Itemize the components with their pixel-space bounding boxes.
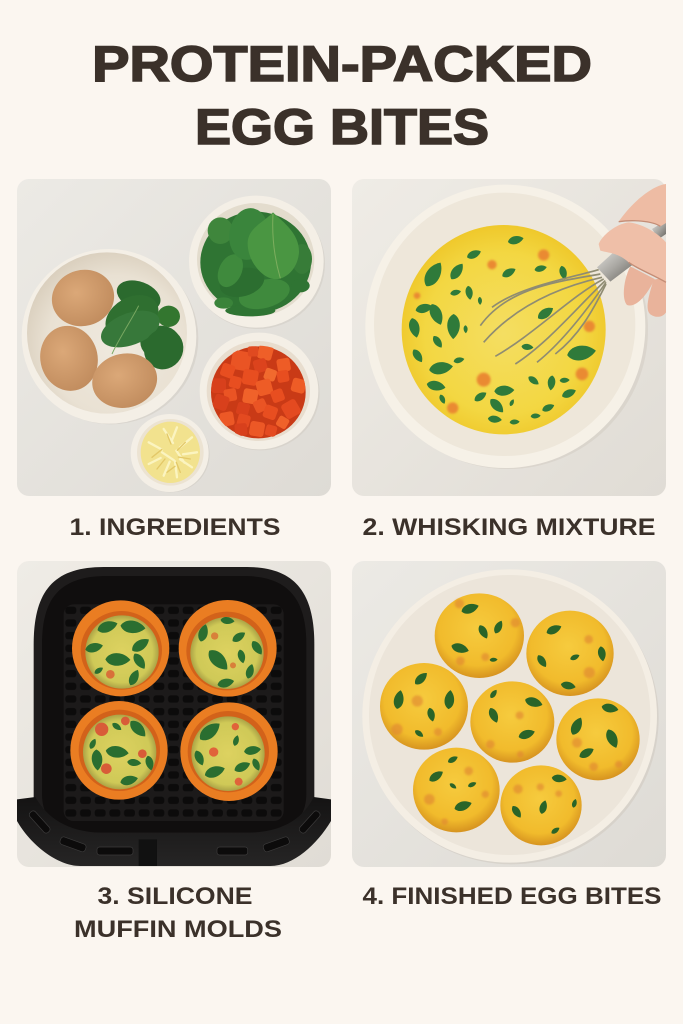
egg bite 6 xyxy=(413,748,500,832)
label: finished egg bites: 4. FINISHED EGG BITES xyxy=(362,883,662,910)
label: silicone muffin molds: 3. SILICONE xyxy=(98,883,252,910)
egg mixture with spinach xyxy=(402,225,606,434)
bowl with chopped red peppers xyxy=(200,333,320,450)
bowl with shredded cheese xyxy=(131,414,210,492)
large bowl xyxy=(365,185,648,469)
silicone mold: bottom left xyxy=(70,701,168,800)
panel: whisking mixture xyxy=(352,179,666,496)
air fryer basket xyxy=(17,567,331,866)
egg bite 7 xyxy=(500,765,582,845)
silicone mold: top right xyxy=(179,600,277,697)
whisk xyxy=(480,221,666,364)
title: PROTEIN-PACKED xyxy=(92,37,592,92)
panel: ingredients xyxy=(17,179,331,496)
label: silicone muffin molds: MUFFIN MOLDS xyxy=(74,916,282,943)
silicone mold: bottom right xyxy=(180,702,278,801)
bowl with spinach xyxy=(189,196,325,329)
egg bite 5 xyxy=(556,698,640,780)
label: whisking mixture: 2. WHISKING MIXTURE xyxy=(362,514,656,541)
hand xyxy=(599,184,666,317)
basket grid xyxy=(64,604,284,821)
label: ingredients: 1. INGREDIENTS xyxy=(70,514,280,541)
title xyxy=(92,37,592,156)
panel: finished egg bites xyxy=(352,561,666,867)
egg bite 4 xyxy=(470,681,554,763)
plate xyxy=(362,569,659,864)
silicone mold: top left xyxy=(72,600,169,696)
bowl with eggs and spinach xyxy=(22,249,198,424)
label: silicone muffin molds xyxy=(74,883,282,943)
egg bite 3 xyxy=(380,663,468,750)
egg bite 2 xyxy=(526,611,614,696)
fryer handle xyxy=(17,797,331,866)
egg bite 1 xyxy=(435,593,524,678)
panel: silicone muffin molds xyxy=(17,561,331,867)
title: EGG BITES xyxy=(195,100,489,156)
